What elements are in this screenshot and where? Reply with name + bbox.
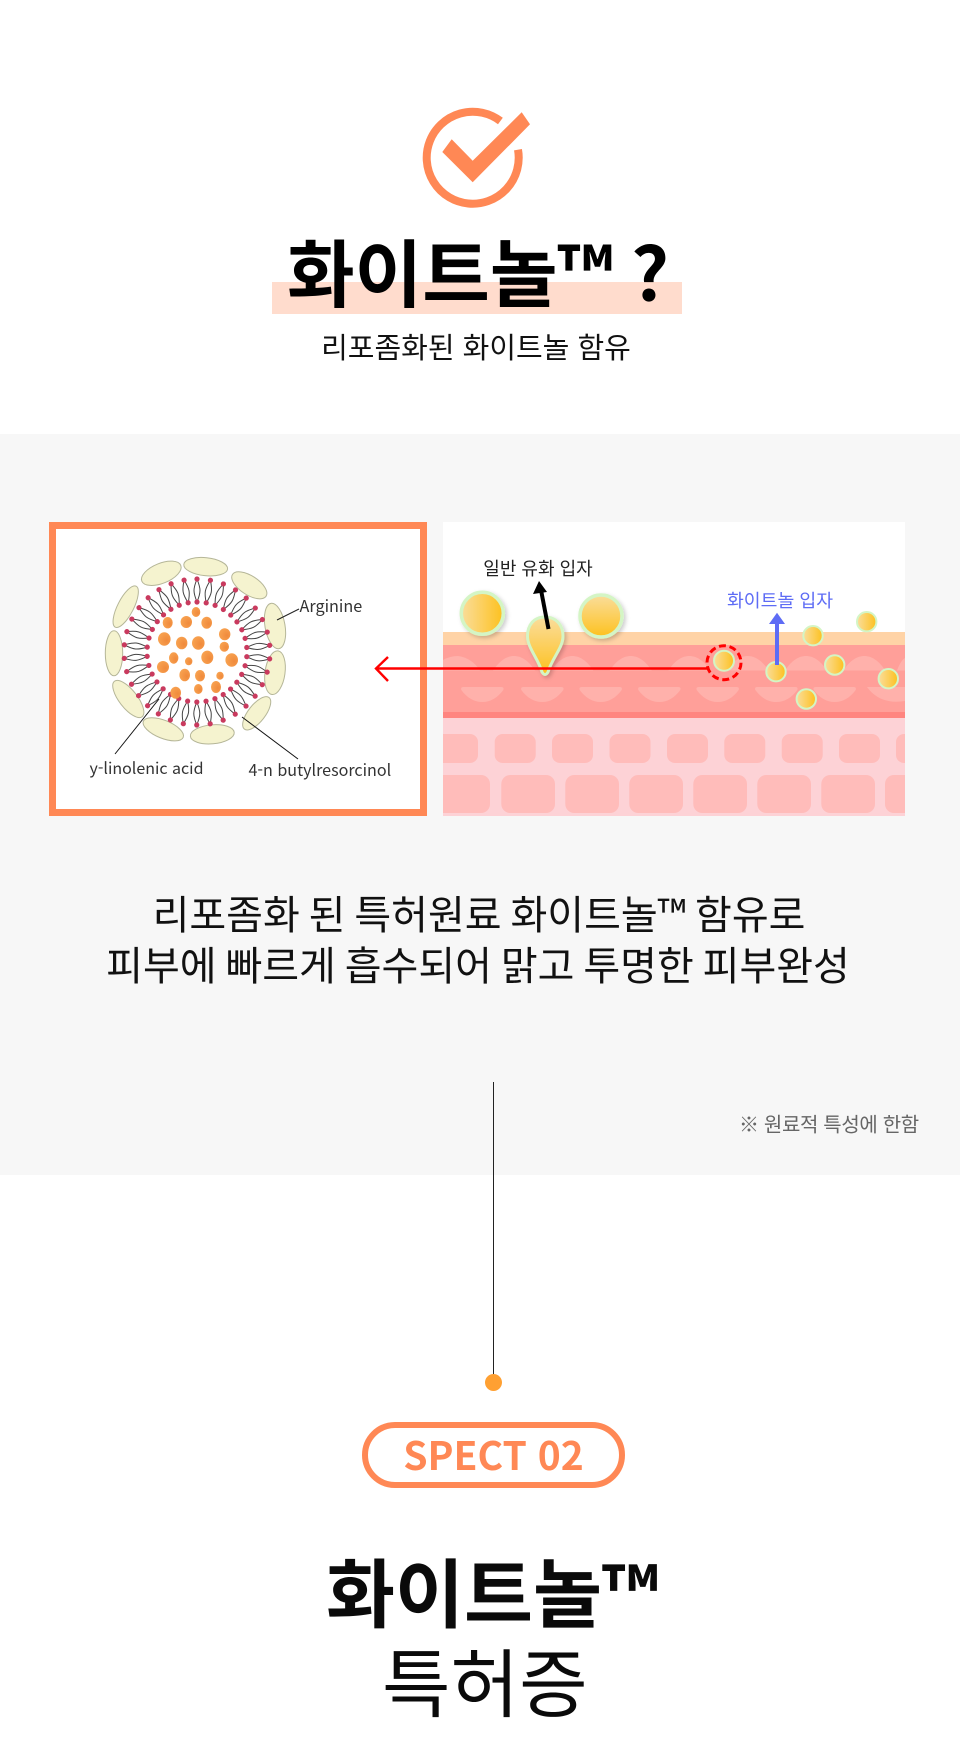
whitenol particles [714,612,898,709]
heading: whitenol question: 화이트놀™ [287,217,613,323]
label: whitenol particle with arrow: 화이트놀 입자 [727,587,833,613]
heading: whitenol patent: 화이트놀™ [326,1534,659,1644]
text block: description [106,883,850,992]
badge: SPECT 02: SPECT 02 [403,1426,584,1482]
outer arginine ellipses [105,555,289,746]
heading: whitenol patent: 특허증 [382,1626,588,1733]
subtitle: 리포좀화된 화이트놀 함유 [321,325,631,367]
label: regular emulsion particle with arrow: 일반 유화 입자 [483,555,593,581]
panel: skin cross-section [443,522,905,816]
core droplets [157,607,238,699]
label: 4-n butylresorcinol [242,717,391,781]
text block: description: 피부에 빠르게 흡수되어 맑고 투명한 피부완성 [106,934,850,992]
label: Arginine [277,593,362,620]
heading: whitenol question: ? [631,216,669,323]
heading: whitenol patent [326,1534,659,1733]
label: y-linolenic acid: y-linolenic acid [90,755,204,779]
label: regular emulsion particle with arrow [483,555,593,629]
skin domes [443,656,905,702]
label: Arginine: Arginine [300,593,362,617]
footnote: ※ 원료적 특성에 한함 [739,1108,919,1138]
label: y-linolenic acid [90,699,204,779]
icon: orange check mark in ring [427,112,530,204]
arrow: red pointer to liposome [376,657,707,681]
skin cells [443,734,905,813]
lipid ring [121,576,273,728]
label: 4-n butylresorcinol: 4-n butylresorcinol [248,757,391,781]
badge: SPECT 02 [365,1425,622,1485]
panel: grey background band [0,434,960,1175]
large emulsion particles [461,592,622,674]
dashed highlight circle [707,646,741,680]
panel: liposome diagram [52,526,424,812]
label: whitenol particle with arrow [727,587,833,665]
text block: description: 리포좀화 된 특허원료 화이트놀™ 함유로 [153,883,805,941]
connector line with dot [485,1082,502,1391]
